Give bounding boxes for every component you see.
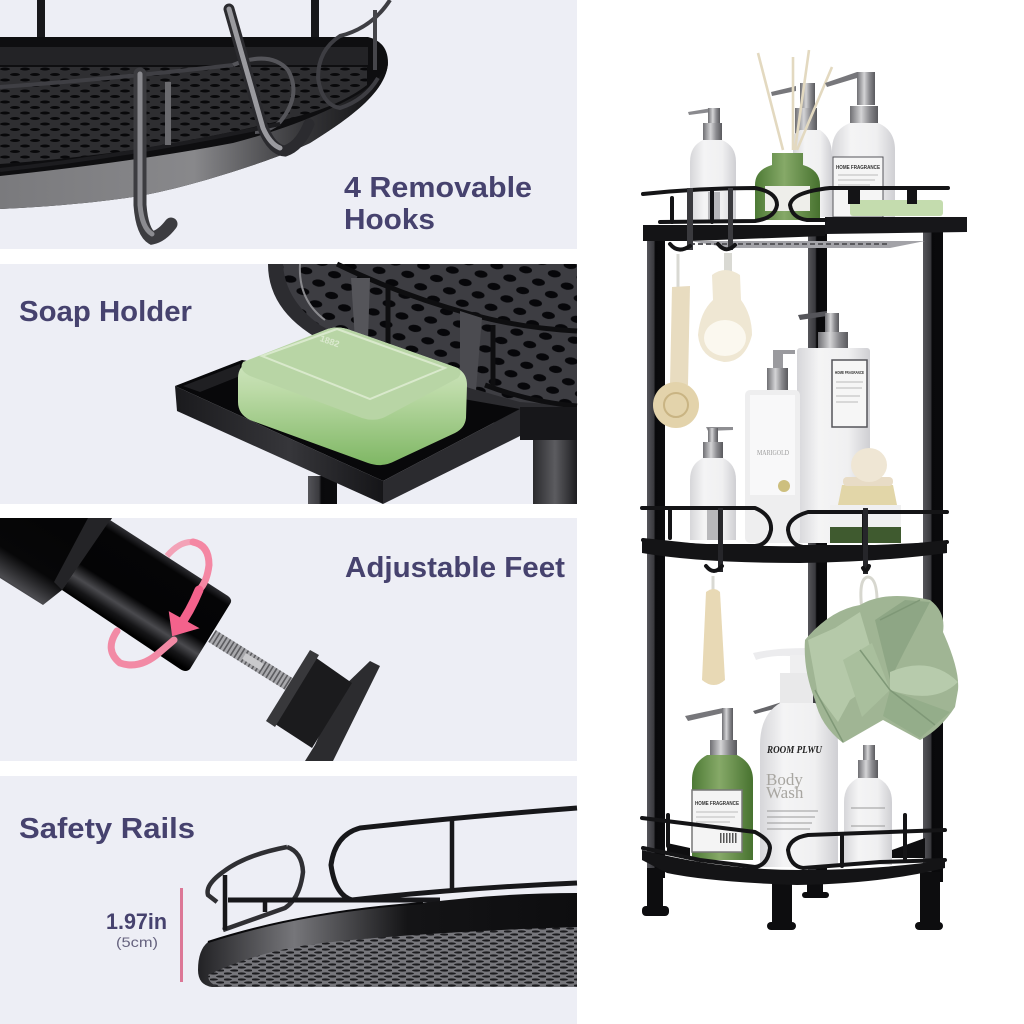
pump bottle: top right: HOME FRAGRANCE	[836, 165, 881, 171]
icon: hook right	[229, 9, 309, 151]
middle shelf	[642, 508, 947, 574]
hanging bath brush	[653, 254, 699, 428]
back pump nozzle	[753, 702, 782, 714]
hanging loop	[861, 577, 877, 610]
heading: 4 Removable Hooks: 4 Removable	[344, 172, 532, 204]
panel: 4 removable hooks	[0, 0, 577, 249]
measurement: 1.97 in	[106, 888, 183, 982]
cleaning brush	[830, 448, 901, 543]
product: corner shelf	[642, 50, 967, 930]
measurement: 1.97 in: 1.97in	[106, 909, 167, 934]
green pump bottle: HOME FRAGRANCE	[695, 801, 740, 807]
top shelf	[643, 187, 948, 250]
green soap on tray	[850, 200, 943, 216]
hanging round brush	[698, 253, 752, 362]
heading: Soap Holder: Soap Holder	[19, 296, 192, 328]
heading: Adjustable Feet: Adjustable Feet	[345, 552, 565, 584]
green pump bottle	[685, 708, 753, 860]
tall bottles: middle: HOME FRAGRANCE	[835, 370, 864, 375]
panel: safety rails	[0, 776, 577, 1024]
pump bottle: top left	[688, 108, 736, 222]
panel: adjustable feet	[0, 518, 577, 761]
body wash bottle: Wash	[766, 783, 804, 802]
bath loofah	[805, 596, 958, 743]
heading: 4 Removable Hooks: Hooks	[344, 204, 435, 236]
tall bottles: middle	[745, 311, 870, 543]
threaded screw	[212, 636, 292, 686]
soap bar: 1882	[319, 333, 341, 349]
foot pad	[266, 650, 380, 761]
rotation arrow	[111, 542, 209, 665]
pump bottle: top right	[825, 72, 895, 217]
leg cylinder	[0, 518, 231, 671]
hanging small brush	[702, 576, 725, 685]
shelf tray with perforated floor	[0, 0, 390, 209]
back bottle: top	[771, 83, 832, 217]
reed diffuser	[755, 50, 832, 220]
panel: soap holder	[0, 264, 577, 504]
shelf legs	[647, 232, 943, 882]
round shelf behind	[268, 264, 577, 504]
tray	[198, 893, 577, 987]
icon: hook left	[140, 74, 171, 238]
body wash bottle	[753, 648, 838, 867]
safety rail loops	[208, 808, 577, 930]
pump bottle: middle small	[690, 427, 736, 540]
soap tray	[175, 360, 520, 504]
soap bar	[238, 328, 467, 465]
rotation ring back half	[167, 542, 193, 556]
body wash bottle: ROOM PLWU	[766, 745, 823, 756]
small silver bottle	[844, 745, 892, 865]
measurement: 1.97 in: (5cm)	[116, 934, 158, 950]
tall bottles: middle: MARIGOLD	[757, 449, 789, 457]
body wash bottle: Body	[766, 770, 803, 789]
heading: 4 Removable Hooks	[344, 176, 531, 230]
feet	[642, 868, 943, 930]
soap tray: top shelf	[825, 217, 967, 234]
heading: Safety Rails: Safety Rails	[19, 813, 195, 845]
bottom shelf	[642, 815, 945, 885]
